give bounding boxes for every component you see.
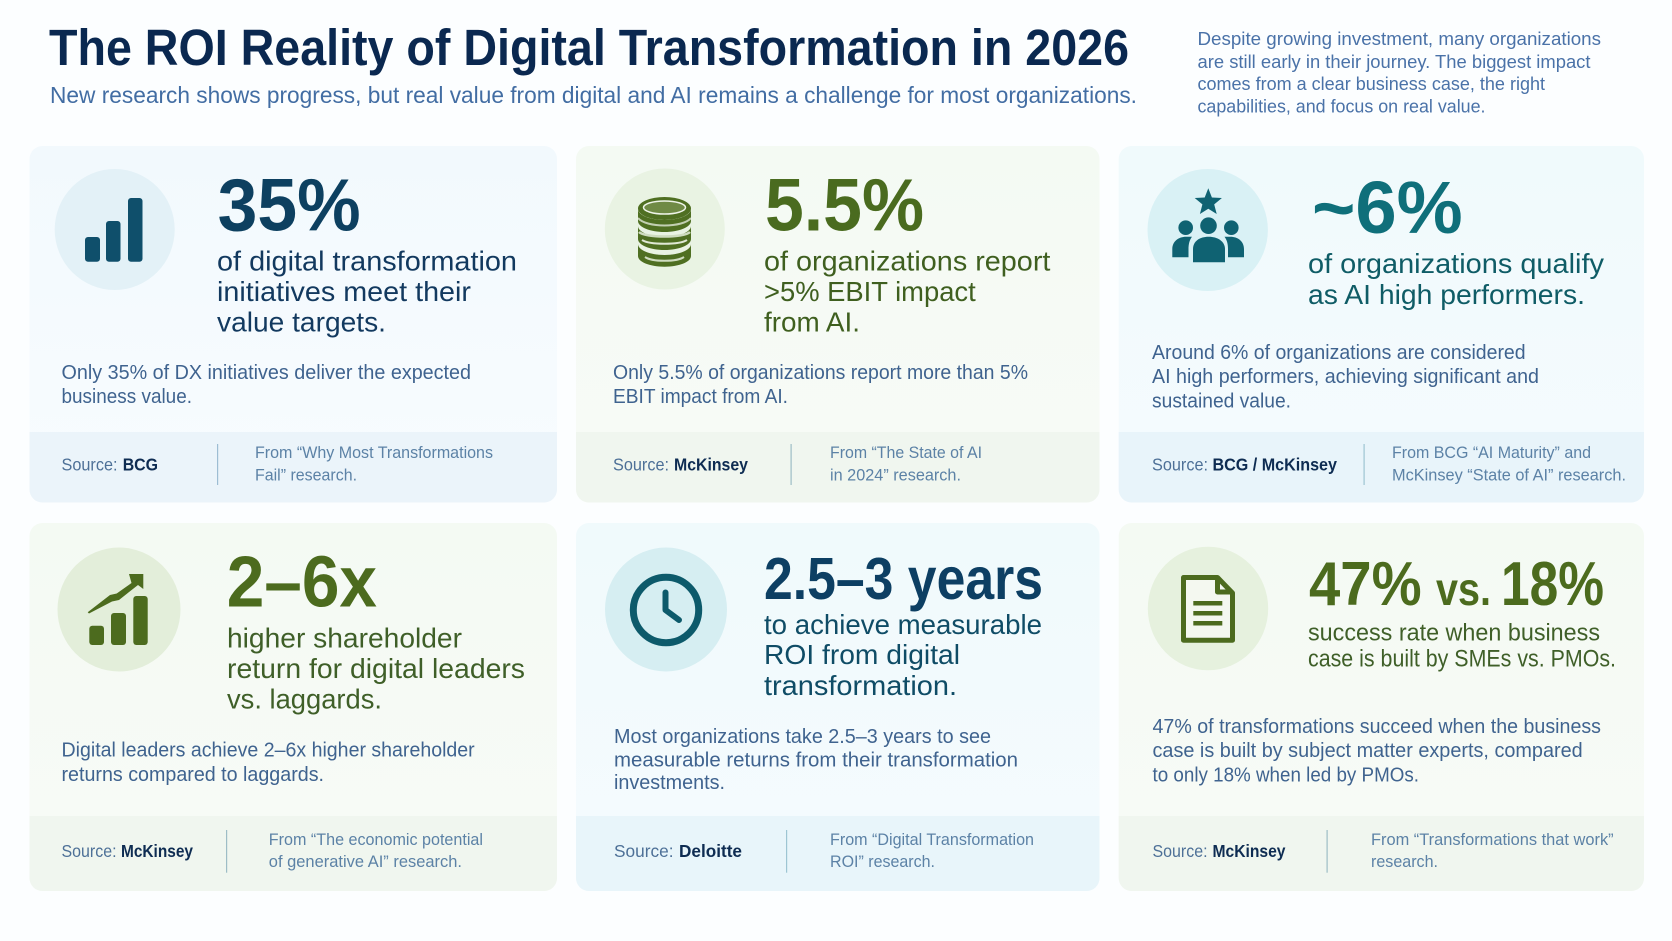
statement (227, 622, 525, 715)
statement: ROI from digital (764, 639, 960, 670)
source: Source: (62, 841, 116, 861)
description: business value. (62, 385, 192, 408)
source: Source: (1152, 455, 1208, 475)
description: 47% of transformations succeed when the business (1152, 715, 1601, 738)
source: McKinsey (121, 841, 193, 861)
research reference: of generative AI” research. (269, 852, 462, 871)
source (62, 455, 158, 475)
description: Only 5.5% of organizations report more than 5% (613, 361, 1028, 384)
research reference: From BCG “AI Maturity” and (1392, 443, 1591, 462)
card footer band (576, 816, 1100, 891)
source (614, 841, 742, 861)
statement: >5% EBIT impact (764, 276, 976, 307)
statement: higher shareholder (227, 622, 462, 654)
statement: as AI high performers. (1308, 279, 1585, 310)
icon: growth chart with arrow (58, 548, 180, 672)
research reference (830, 443, 982, 485)
stat: 47% vs. 18% (1309, 550, 1604, 619)
research reference: in 2024” research. (830, 466, 961, 485)
icon: team with star (1148, 169, 1268, 291)
source: Source: (62, 455, 118, 475)
description: Only 35% of DX initiatives deliver the expected (62, 361, 471, 384)
source (1152, 841, 1286, 861)
research reference: From “Why Most Transformations (255, 443, 493, 462)
research reference (255, 443, 493, 485)
source: BCG / McKinsey (1212, 455, 1337, 475)
stat: 35%: 35% (218, 164, 361, 247)
description: investments. (614, 771, 725, 794)
icon: coin stack (605, 168, 725, 290)
card background (576, 146, 1100, 502)
card footer band (576, 432, 1100, 502)
statement: of organizations report (764, 246, 1051, 277)
description: Around 6% of organizations are considered (1152, 341, 1526, 364)
panel: 2–6x shareholder return (30, 523, 557, 891)
stat: 2.5–3 years: 2.5–3 years (764, 546, 1043, 612)
intro paragraph: capabilities, and focus on real value. (1198, 96, 1486, 116)
research reference: From “Transformations that work” (1371, 830, 1614, 849)
source: McKinsey (674, 455, 748, 475)
research reference: ROI” research. (830, 852, 935, 871)
header (49, 19, 1601, 116)
description: Most organizations take 2.5–3 years to see (614, 725, 991, 748)
statement: from AI. (764, 307, 860, 338)
stat: 47% vs. 18%: vs. (1436, 563, 1491, 615)
research reference: From “Digital Transformation (830, 830, 1034, 849)
title: The ROI Reality of Digital Transformation in 2026 (49, 19, 1129, 76)
research reference: From “The State of AI (830, 443, 982, 462)
icon: clock (605, 548, 727, 672)
card footer band (30, 816, 557, 891)
card background (30, 523, 557, 891)
intro paragraph: are still early in their journey. The biggest impact (1198, 51, 1590, 72)
card footer band (1119, 432, 1644, 502)
panel: 5.5% EBIT impact (576, 146, 1100, 502)
stat: 5.5%: 5.5% (765, 164, 924, 247)
statement (764, 246, 1051, 338)
description: AI high performers, achieving significant and (1152, 365, 1539, 388)
statement: of organizations qualify (1308, 248, 1604, 279)
description: case is built by subject matter experts, compared (1152, 739, 1583, 762)
source (62, 841, 193, 861)
statement (764, 609, 1042, 701)
intro paragraph: comes from a clear business case, the right (1198, 73, 1545, 94)
description (1152, 715, 1601, 787)
statement: of digital transformation (217, 246, 517, 277)
statement: return for digital leaders (227, 653, 525, 684)
intro paragraph: Despite growing investment, many organizations (1198, 28, 1601, 49)
statement (1308, 248, 1604, 310)
description: Digital leaders achieve 2–6x higher shareholder (62, 739, 475, 762)
icon: document (1148, 547, 1268, 670)
statement (217, 246, 517, 338)
card background (30, 146, 557, 502)
description: measurable returns from their transformation (614, 749, 1018, 772)
description (613, 361, 1028, 408)
description (62, 361, 471, 408)
card background (1119, 146, 1644, 502)
intro paragraph (1198, 28, 1601, 116)
source: McKinsey (1212, 841, 1286, 861)
card background (576, 523, 1100, 891)
panel: 2.5–3 years to ROI (576, 523, 1100, 891)
source: BCG (123, 455, 158, 475)
icon: bar chart (55, 169, 175, 290)
statement: initiatives meet their (217, 276, 471, 307)
research reference (269, 830, 483, 871)
card background (1119, 523, 1644, 891)
panel: 35% value targets (30, 146, 557, 502)
research reference: Fail” research. (255, 466, 357, 485)
source: Source: (1152, 841, 1208, 861)
research reference (1392, 443, 1626, 485)
source: Source: (613, 455, 669, 475)
source (1152, 455, 1337, 475)
source: Deloitte (679, 841, 742, 861)
research reference (1371, 830, 1614, 871)
description: returns compared to laggards. (62, 763, 324, 786)
description (1152, 341, 1539, 412)
source (613, 455, 748, 475)
panel: 47% vs. 18% success rate (1119, 523, 1644, 891)
description (62, 739, 475, 786)
statement: transformation. (764, 670, 957, 701)
stat: 47% vs. 18%: 18% (1501, 550, 1604, 619)
subtitle: New research shows progress, but real value from digital and AI remains a challenge for most organizations. (50, 82, 1137, 108)
stat: ~6%: ~6% (1312, 166, 1463, 249)
description (614, 725, 1018, 794)
stat: 2–6x: 2–6x (227, 543, 377, 623)
statement: vs. laggards. (227, 684, 382, 715)
panel: ~6% AI high performers (1119, 146, 1644, 502)
research reference: McKinsey “State of AI” research. (1392, 466, 1626, 485)
card footer band (1119, 816, 1644, 891)
statement (1308, 620, 1616, 673)
source: Source: (614, 841, 674, 861)
research reference: research. (1371, 852, 1438, 871)
statement: value targets. (217, 307, 386, 338)
research reference (830, 830, 1034, 871)
card footer band (30, 432, 557, 502)
stat: 47% vs. 18%: 47% (1309, 550, 1422, 619)
statement: to achieve measurable (764, 609, 1042, 640)
research reference: From “The economic potential (269, 830, 483, 849)
description: sustained value. (1152, 390, 1291, 412)
description: EBIT impact from AI. (613, 385, 788, 408)
description: to only 18% when led by PMOs. (1152, 764, 1419, 787)
statement: success rate when business (1308, 620, 1600, 647)
statement: case is built by SMEs vs. PMOs. (1308, 646, 1616, 673)
